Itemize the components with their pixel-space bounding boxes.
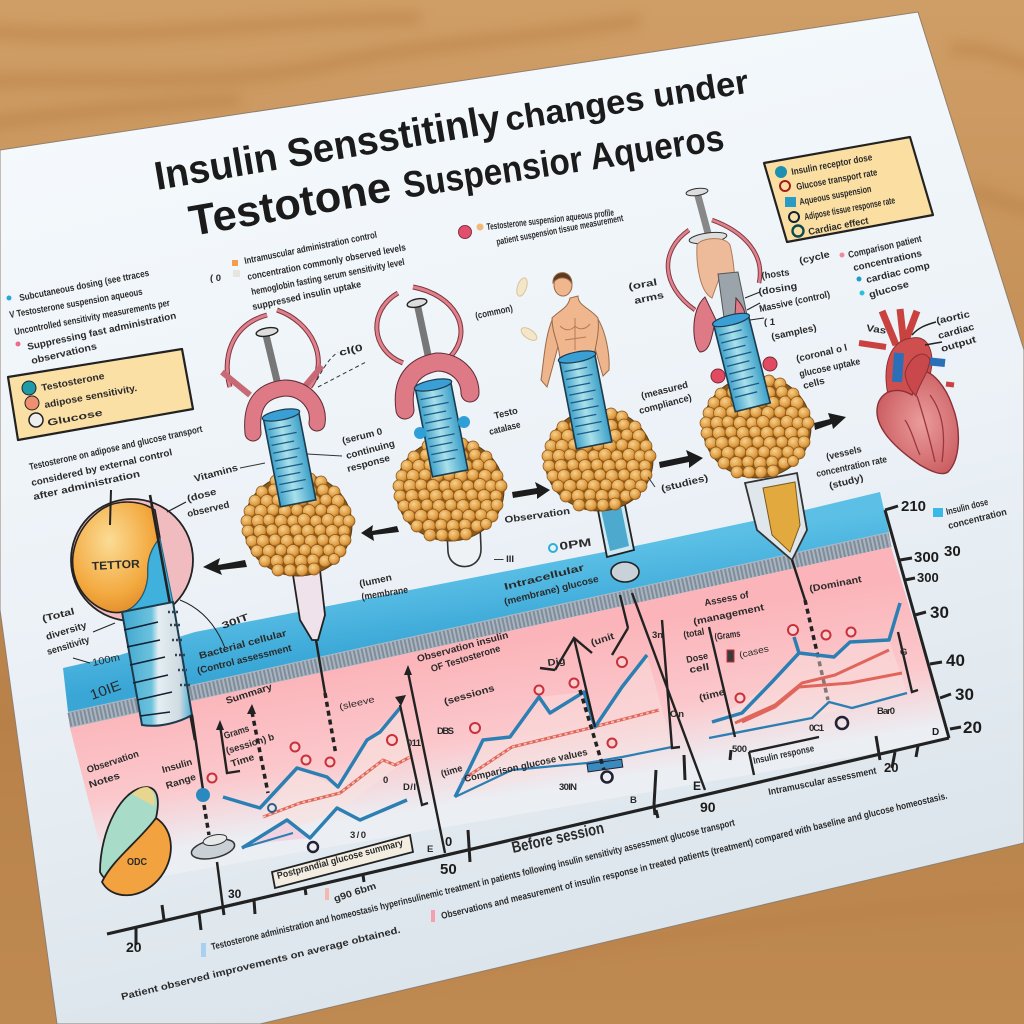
big ball and large syringe [71, 490, 236, 908]
heart labels: Vas [866, 323, 887, 337]
membrane labels left: 10IE [88, 677, 123, 703]
chart 1: before injection series: Time [230, 752, 256, 770]
chart 1: before injection series: 3/0 [350, 830, 366, 841]
membrane labels left: Summary [225, 681, 274, 707]
text block: left notes [6, 268, 177, 367]
legend: right [764, 137, 933, 242]
text block: top right notes: Comparison patient [847, 233, 923, 261]
syringe 4 and gland [668, 187, 828, 700]
text block: top right notes: cardiac comp [865, 260, 931, 286]
membrane labels left: 0PM [559, 537, 592, 553]
labels around syringes: (measured [640, 380, 689, 402]
chart 1: before injection series: Grams [223, 723, 251, 742]
title: Suspensior Aqueros [400, 117, 727, 206]
text block: left notes: observations [30, 341, 98, 367]
text block: bottom notes [120, 765, 949, 1003]
chart 1: before injection series [208, 665, 445, 888]
labels around syringes: (dosing [758, 281, 798, 298]
chart 2: during treatment series: (time [440, 763, 464, 780]
axis: right value axis: 30 [930, 603, 949, 622]
membrane labels left: diversity [45, 620, 89, 643]
icon: bean organ: Insulin [161, 757, 194, 776]
legend: left: adipose sensitivity. [44, 383, 138, 411]
text block: top centre right [458, 208, 625, 248]
labels around syringes [186, 267, 831, 603]
chart 2: during treatment series: On [670, 709, 684, 720]
labels around syringes: cl(0 [338, 342, 364, 359]
axis: bottom time axis: 30 [228, 887, 242, 901]
legend: left [8, 349, 193, 440]
gray cell membrane band [68, 532, 891, 728]
icon: bean organ: Observation [86, 749, 140, 776]
chart 2: during treatment series: Dig [547, 656, 566, 669]
axis: bottom time axis: 20 [884, 760, 898, 775]
text block: left notes: Suppressing fast administration [26, 311, 177, 353]
legend: left: Testosterone [40, 371, 105, 394]
labels around syringes: (membrane [361, 585, 409, 603]
axis: right value axis: 30 [955, 685, 974, 704]
axis: bottom time axis [107, 736, 949, 955]
membrane labels left [41, 537, 600, 708]
membrane labels left: Bacterial cellular [198, 628, 288, 662]
pink intracellular band [70, 547, 950, 885]
legend: chart key: concentration [947, 507, 1008, 532]
title: Testotone [185, 163, 395, 246]
axis: right value axis: 300 [917, 570, 939, 585]
chart 1: before injection series: (session) b [225, 732, 276, 757]
text block: above ball: Testosterone on adipose and glucose transport [28, 424, 204, 473]
heart labels: cells [802, 376, 826, 392]
chart 2: during treatment series: (unit [590, 631, 617, 649]
chart 3: after treatment series: Dose [685, 651, 709, 666]
labels around syringes: (oral [628, 277, 658, 293]
labels around syringes: (hosts [761, 267, 790, 282]
axis: right value axis [885, 498, 982, 738]
labels around syringes: Massive (control) [758, 289, 831, 315]
labels around syringes: Testo [493, 405, 519, 422]
icon: bean organ: Notes [88, 771, 121, 791]
chart 2: during treatment series: Comparison glucose values [463, 747, 589, 785]
icon: bean organ [86, 749, 197, 895]
text block: bottom notes: g90 6bm [333, 881, 378, 905]
chart 3: after treatment series: (cases [738, 643, 770, 660]
axis: right value axis: 40 [946, 651, 965, 670]
legend: chart key [933, 497, 1008, 532]
axis: right value axis: 300 [914, 549, 939, 566]
icon: bean organ: Range [165, 772, 197, 792]
axis: bottom time axis: 0 [445, 834, 452, 849]
membrane labels left: (membrane) glucose [503, 574, 600, 608]
blue extracellular band [63, 492, 889, 712]
labels around syringes: Vitamins [193, 463, 239, 485]
chart 2: during treatment series [437, 593, 705, 806]
legend: right: Insulin receptor dose [791, 152, 873, 178]
big ball and large syringe: TETTOR [92, 558, 141, 573]
text block: left notes: V Testosterone suspension aqueous [9, 287, 143, 321]
text block: top centre left: Intramuscular administration control [243, 230, 378, 267]
labels around syringes: arms [633, 290, 665, 307]
icon: heart [859, 309, 958, 474]
syringe and gland 1 [222, 310, 355, 755]
membrane labels left: OF Testosterone [430, 643, 502, 675]
chart 3: after treatment series: (management [692, 602, 766, 628]
membrane labels left: (Control assessment [196, 643, 294, 677]
labels around syringes: — III [494, 554, 514, 565]
axis: right value axis: 20 [963, 718, 982, 737]
heart labels: cardiac [937, 322, 976, 342]
legend: right: Aqueous suspension [799, 184, 872, 208]
axis: bottom time axis: 90 [700, 799, 716, 815]
legend: left: Glucose [46, 407, 104, 429]
text block: left notes: Uncontrolled sensitivity measurements per [14, 298, 171, 338]
icon: bean organ: ODC [127, 857, 147, 868]
chart 1: before injection series: D/I [403, 782, 416, 793]
text block: top centre right: patient suspension tissue measurement [496, 213, 625, 248]
labels around syringes: (samples) [770, 323, 818, 343]
text block: top centre left [210, 230, 407, 313]
chart 3: after treatment series: (time [698, 687, 726, 704]
chart 1: before injection series: 011 [407, 738, 422, 749]
chart 3: after treatment series: Insulin response [752, 743, 815, 767]
membrane labels left: Observation insulin [416, 630, 510, 665]
labels around syringes: continuing [345, 438, 396, 462]
labels around syringes: Observation [504, 506, 571, 526]
labels around syringes: (dose [186, 487, 218, 505]
labels around syringes: observed [186, 499, 231, 520]
chart 1: before injection series: 0 [383, 775, 388, 786]
text block: top centre left: hemoglobin fasting serum sensitivity level [250, 257, 406, 298]
labels around syringes: (1 [764, 317, 776, 328]
chart 3: after treatment series: 0C1 [809, 723, 825, 734]
membrane labels left: 100m [91, 652, 121, 669]
axis: bottom time axis: 20 [126, 939, 142, 955]
chart 3: after treatment series: cell [689, 662, 710, 676]
title: changes under [502, 63, 751, 139]
chart 3: after treatment series: (Grams [714, 628, 741, 643]
text block: above ball: after administration [32, 469, 141, 503]
heart labels: (coronal o l [795, 343, 848, 365]
legend: right: Glucose transport rate [796, 167, 878, 193]
text block: above ball: considered by external control [30, 447, 173, 489]
membrane labels left: (Total [41, 606, 76, 625]
text block: bottom notes: Observations and measurement of insulin response in treated patients (treatment) compared with baseline and glucose homeostasis. [440, 791, 949, 922]
membrane labels left: (sessions [443, 683, 496, 708]
axis: right value axis: D [932, 727, 939, 738]
labels around syringes: (serum 0 [341, 426, 384, 447]
title: Insulin Sensstitinly [151, 97, 504, 199]
labels around syringes: catalase [488, 419, 522, 438]
chart 3: after treatment series: Bar0 [877, 706, 895, 717]
chart 2: during treatment series: B [630, 795, 637, 806]
axis: bottom time axis: 50 [440, 861, 457, 878]
text block: top centre right: Testosterone suspension aqueous profile [486, 208, 615, 233]
syringe and gland 2 [377, 287, 507, 567]
chart 1: before injection series: (sleeve [338, 694, 376, 712]
text block: top centre left: ( 0 [210, 273, 221, 284]
membrane labels left: Intracellular [503, 562, 586, 593]
heart labels: (study) [828, 473, 865, 492]
labels around syringes: response [346, 453, 391, 475]
axis: bottom time axis: E [693, 779, 701, 793]
heart labels: glucose uptake [798, 356, 861, 380]
labels around syringes: (lumen [358, 572, 393, 590]
axis: right value axis: 30 [944, 543, 961, 560]
syringe 3 and human figure [515, 273, 656, 582]
labels around syringes: (common) [474, 303, 514, 322]
title [151, 63, 751, 246]
text block: bottom notes: Testosterone administration and homeostasis hyperinsulinemic treatment in patients following insulin sensitivity assessment glucose transport [210, 817, 737, 953]
chart 3: after treatment series: G [900, 647, 907, 658]
text block: bottom notes: Intramuscular assessment [767, 765, 878, 798]
heading: before session: Before session [510, 820, 606, 857]
chart caption box: Postprandial glucose summary [276, 837, 405, 882]
text block: above ball [28, 424, 204, 503]
text block: top centre left: concentration commonly observed levels [247, 242, 407, 283]
chart 3: after treatment series: (Dominant [808, 574, 864, 595]
text block: top centre left: suppressed insulin uptake [251, 279, 362, 313]
text block: top right notes: concentrations [852, 248, 923, 274]
chart 3: after treatment series: 500 [732, 744, 747, 755]
text block: top right notes: glucose [868, 279, 910, 301]
text block: bottom notes: Patient observed improvements on average obtained. [120, 925, 402, 1003]
text block: top right notes: (cycle [798, 249, 831, 267]
legend: right: Cardiac effect [807, 215, 870, 238]
labels around syringes: compliance) [638, 392, 693, 417]
icon: man [541, 273, 609, 387]
labels around syringes: (studies) [660, 473, 709, 495]
heart labels: (aortic [935, 309, 971, 327]
chart 3: after treatment series: (total [683, 626, 705, 641]
chart 2: during treatment series: DBS [437, 726, 454, 737]
heart labels: concentration rate [815, 454, 888, 480]
arrows [203, 413, 846, 575]
heart labels: (vessels [825, 444, 863, 463]
legend: chart key: Insulin dose [945, 497, 989, 518]
legend: right: Adipose tissue response rate [804, 195, 896, 223]
chart 2: during treatment series: 30IN [559, 782, 577, 793]
chart 3: after treatment series [683, 574, 918, 775]
text block: left notes: Subcutaneous dosing (see ttraces [18, 268, 150, 304]
membrane labels left: sensitivity [46, 634, 92, 658]
heart labels [795, 309, 978, 492]
axis: right value axis: 210 [901, 498, 926, 515]
membrane labels left: 30IT [220, 612, 251, 632]
chart 2: during treatment series: 3n [652, 630, 663, 641]
text block: top right notes [798, 233, 931, 301]
chart 3: after treatment series: Assess of [703, 589, 751, 609]
heart labels: output [940, 334, 978, 355]
axis: bottom time axis: E [427, 844, 433, 855]
